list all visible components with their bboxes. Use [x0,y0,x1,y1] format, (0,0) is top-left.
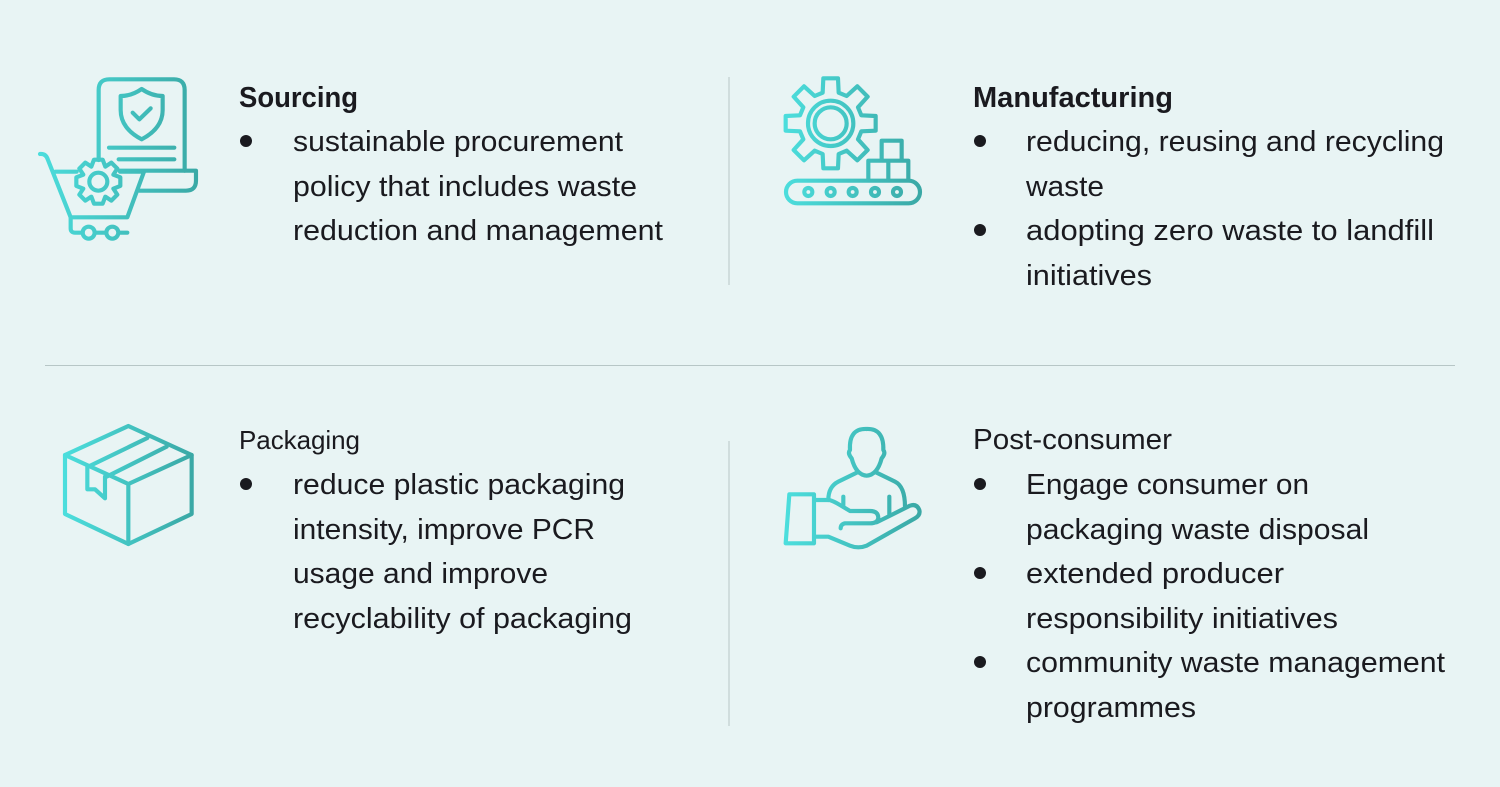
text block: post-consumer bullets: responsibility initiatives [1026,603,1338,635]
text block: packaging bullet: intensity, improve PCR [293,514,595,546]
text block: packaging bullet: usage and improve [293,558,548,590]
text block: manufacturing bullets: initiatives [1026,260,1152,292]
text block: packaging bullet: reduce plastic packaging [293,469,625,501]
text block: sourcing bullet: reduction and management [293,215,663,247]
text block: post-consumer bullets: packaging waste disposal [1026,514,1369,546]
text block: manufacturing bullets: adopting zero waste to landfill [1026,215,1434,247]
icon: gear and conveyor belt [786,78,920,203]
panel: post-consumer [786,424,1445,724]
text block: post-consumer bullets: extended producer [1026,558,1284,590]
panel: manufacturing [786,78,1444,292]
text block: packaging bullet [240,469,632,635]
panel: packaging [65,425,632,635]
text block: manufacturing bullets [974,126,1444,292]
heading: Packaging: Packaging [239,425,360,455]
icon: cardboard box [65,426,192,544]
text block: post-consumer bullets [974,469,1445,724]
text block: post-consumer bullets: programmes [1026,692,1196,724]
panel: sourcing [40,79,663,247]
text block: manufacturing bullets: reducing, reusing and recycling [1026,126,1444,158]
text block: manufacturing bullets: waste [1025,171,1104,203]
text block: sourcing bullet: policy that includes waste [293,171,637,203]
text block: sourcing bullet: sustainable procurement [293,126,623,158]
text block: sourcing bullet [240,126,663,247]
text block: post-consumer bullets: Engage consumer on [1026,469,1309,501]
heading: Sourcing: Sourcing [239,82,358,114]
icon: person on open hand [786,429,920,547]
text block: post-consumer bullets: community waste management [1026,647,1445,679]
heading: Post-consumer: Post-consumer [973,424,1172,456]
icon: laptop, shield and shopping cart with gear [40,79,196,239]
heading: Manufacturing: Manufacturing [973,82,1173,114]
text block: packaging bullet: recyclability of packaging [293,603,632,635]
